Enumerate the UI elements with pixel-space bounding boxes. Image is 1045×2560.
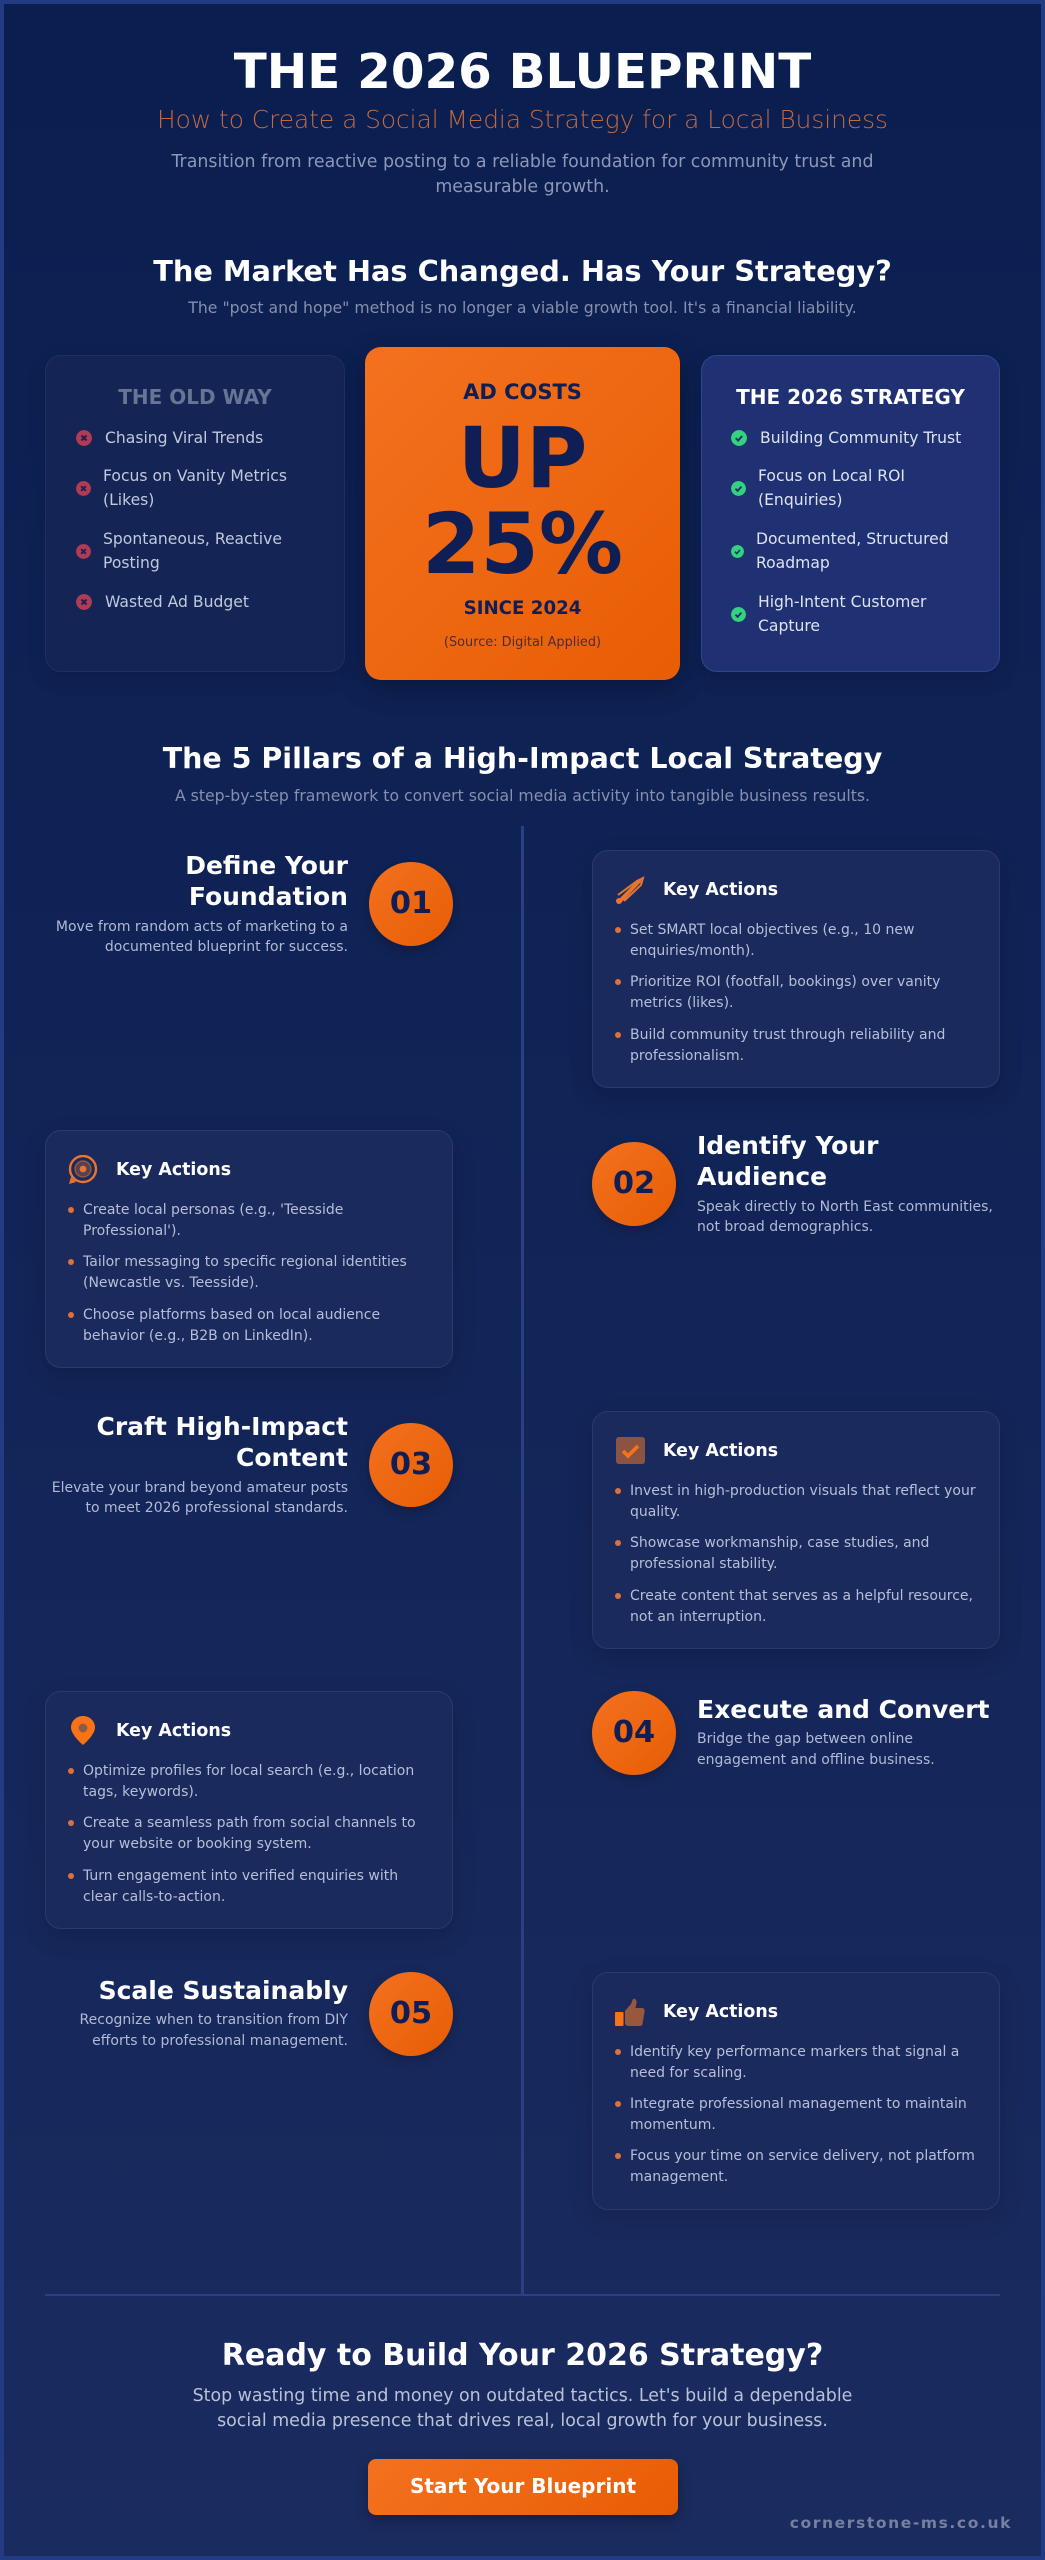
action list: Focus your time on service delivery, not platform bbox=[630, 2148, 975, 2164]
card heading: Key Actions bbox=[116, 1721, 231, 1741]
pillar 1 description bbox=[56, 918, 348, 955]
icon: target bubble bbox=[68, 1155, 98, 1184]
cta heading: Ready to Build Your 2026 Strategy? bbox=[222, 2338, 823, 2373]
pillar 1 description: Move from random acts of marketing to a bbox=[56, 918, 348, 934]
action list: Integrate professional management to maintain bbox=[630, 2096, 967, 2112]
big stat: 25% bbox=[422, 495, 623, 593]
action list: Choose platforms based on local audience bbox=[83, 1307, 380, 1323]
item text bbox=[756, 530, 949, 572]
item text: High-Intent Customer bbox=[758, 593, 926, 611]
pillar 5 number bbox=[369, 1972, 453, 2056]
pillar 5 key actions card bbox=[592, 1972, 1000, 2210]
pillar 1 title: Define Your bbox=[185, 851, 348, 880]
pillar 3 description bbox=[52, 1480, 348, 1516]
action list: need for scaling. bbox=[630, 2064, 747, 2080]
panel: the old way bbox=[45, 355, 345, 672]
action list bbox=[68, 1202, 407, 1344]
action list: Create local personas (e.g., 'Teesside bbox=[83, 1202, 343, 1218]
item text: Focus on Vanity Metrics bbox=[103, 467, 287, 485]
action list bbox=[615, 922, 945, 1064]
item text: (Enquiries) bbox=[758, 491, 842, 509]
action list: professionalism. bbox=[630, 1048, 744, 1064]
stat label: AD COSTS bbox=[463, 380, 582, 404]
pillar 4 title block bbox=[697, 1694, 1001, 1774]
website footer: cornerstone-ms.co.uk bbox=[790, 2514, 1012, 2532]
subheading: 5 pillars: A step-by-step framework to convert social media activity into tangible business results. bbox=[175, 786, 870, 805]
panel: ad costs stat bbox=[365, 347, 680, 680]
action list: Invest in high-production visuals that reflect your bbox=[630, 1483, 976, 1499]
icon: cross bbox=[76, 430, 92, 446]
pillar 2 number bbox=[592, 1142, 676, 1226]
strategy item 4 bbox=[731, 593, 926, 635]
action list: Create a seamless path from social channels to bbox=[83, 1815, 416, 1831]
old way item 2 bbox=[76, 467, 287, 509]
pillar 3 title block bbox=[52, 1412, 348, 1516]
pillar 1 description: documented blueprint for success. bbox=[105, 939, 348, 955]
action list: Turn engagement into verified enquiries with bbox=[83, 1868, 398, 1884]
source: (Source: Digital Applied) bbox=[444, 635, 601, 650]
icon: cross bbox=[76, 594, 92, 610]
pillar 5 description: Recognize when to transition from DIY bbox=[80, 2012, 348, 2028]
pillar 5 title: Scale Sustainably bbox=[99, 1976, 348, 2005]
action list: (Newcastle vs. Teesside). bbox=[83, 1275, 259, 1291]
pillar 4 number bbox=[592, 1691, 676, 1775]
pillar 1 title bbox=[185, 851, 348, 911]
action list: your website or booking system. bbox=[83, 1836, 312, 1852]
action list: not an interruption. bbox=[630, 1609, 766, 1625]
since label: SINCE 2024 bbox=[464, 598, 581, 619]
action list bbox=[615, 1483, 976, 1625]
action list: Optimize profiles for local search (e.g., location bbox=[83, 1763, 414, 1779]
subtitle: How to Create a Social Media Strategy for a Local Business bbox=[157, 105, 888, 134]
pillar 2 number: 02 bbox=[613, 1166, 655, 1201]
pillar 1 number bbox=[369, 862, 453, 946]
item text: (Likes) bbox=[103, 491, 154, 509]
icon: pen bbox=[616, 876, 644, 904]
icon: cross bbox=[76, 544, 91, 559]
card heading: Key Actions bbox=[116, 1160, 231, 1180]
pillar 2 description: Speak directly to North East communities, bbox=[697, 1198, 993, 1214]
item text: Wasted Ad Budget bbox=[105, 593, 249, 611]
heading: market changed: The Market Has Changed. Has Your Strategy? bbox=[153, 254, 892, 288]
intro text bbox=[171, 152, 874, 197]
pillar 3 description: to meet 2026 professional standards. bbox=[85, 1500, 348, 1516]
pillar 3 title: Craft High-Impact bbox=[96, 1412, 348, 1441]
cta text: social media presence that drives real, local growth for your business. bbox=[217, 2410, 828, 2430]
icon: check bbox=[731, 607, 746, 622]
item text: Building Community Trust bbox=[760, 429, 961, 447]
pillar 1 title: Foundation bbox=[189, 882, 348, 911]
pillar 5 title block bbox=[44, 1975, 348, 2055]
pillar 5 description bbox=[80, 2010, 348, 2051]
big stat: UP bbox=[458, 409, 587, 507]
card heading: Key Actions bbox=[663, 1441, 778, 1461]
pillar 3 title: Content bbox=[236, 1443, 348, 1472]
item text: Spontaneous, Reactive bbox=[103, 530, 282, 548]
item text: Roadmap bbox=[756, 554, 830, 572]
heading: 5 pillars: The 5 Pillars of a High-Impact Local Strategy bbox=[163, 742, 882, 775]
icon: check bbox=[731, 481, 746, 496]
big stat bbox=[422, 409, 623, 593]
action list: quality. bbox=[630, 1504, 680, 1520]
icon: check box bbox=[616, 1437, 645, 1464]
action list: Professional'). bbox=[83, 1223, 181, 1239]
strategy heading: THE 2026 STRATEGY bbox=[736, 385, 965, 409]
item text: Capture bbox=[758, 617, 820, 635]
action list: professional stability. bbox=[630, 1556, 777, 1572]
item text: Posting bbox=[103, 554, 160, 572]
pillar 2 title: Audience bbox=[697, 1162, 827, 1191]
old way item 1 bbox=[76, 429, 263, 447]
intro text: measurable growth. bbox=[435, 177, 610, 197]
old way heading: THE OLD WAY bbox=[118, 385, 272, 409]
pillar 4 description bbox=[697, 1729, 935, 1770]
action list: behavior (e.g., B2B on LinkedIn). bbox=[83, 1328, 313, 1344]
pillar 2 title: Identify Your bbox=[697, 1131, 878, 1160]
pillar 5 number: 05 bbox=[390, 1996, 432, 2031]
item text: Focus on Local ROI bbox=[758, 467, 905, 485]
card heading: Key Actions bbox=[663, 880, 778, 900]
subheading: market changed: The "post and hope" method is no longer a viable growth tool. It's a financial liability. bbox=[188, 298, 857, 317]
cta text: Stop wasting time and money on outdated tactics. Let's build a dependable bbox=[193, 2386, 852, 2406]
item text bbox=[103, 467, 287, 509]
pillar 4 key actions card bbox=[45, 1691, 453, 1929]
card heading: Key Actions bbox=[663, 2002, 778, 2022]
icon: check bbox=[731, 430, 747, 446]
icon: check bbox=[731, 545, 744, 558]
cta button bbox=[368, 2459, 678, 2515]
pillar 1 title block bbox=[56, 851, 348, 955]
pillar 3 title bbox=[96, 1412, 348, 1472]
pillar 2 key actions card bbox=[45, 1130, 453, 1368]
action list: Identify key performance markers that signal a bbox=[630, 2044, 959, 2060]
item text bbox=[758, 467, 905, 509]
action list: Set SMART local objectives (e.g., 10 new bbox=[630, 922, 914, 938]
pillar 4 description: engagement and offline business. bbox=[697, 1752, 935, 1768]
action list: management. bbox=[630, 2169, 728, 2185]
old way item 3 bbox=[76, 530, 282, 572]
pillar 3 description: Elevate your brand beyond amateur posts bbox=[52, 1480, 348, 1496]
title: THE 2026 BLUEPRINT bbox=[234, 44, 811, 100]
panel: the 2026 strategy bbox=[701, 355, 1000, 672]
icon: thumbs up bbox=[615, 1996, 645, 2026]
pillar 2 description bbox=[697, 1198, 993, 1235]
pillar 2 description: not broad demographics. bbox=[697, 1219, 873, 1235]
cta text bbox=[4, 2384, 1041, 2433]
action list bbox=[68, 1763, 416, 1905]
pillar 4 number: 04 bbox=[613, 1715, 655, 1750]
pillar 1 key actions card bbox=[592, 850, 1000, 1088]
action list: Prioritize ROI (footfall, bookings) over vanity bbox=[630, 974, 940, 990]
action list: Build community trust through reliability and bbox=[630, 1027, 945, 1043]
action list bbox=[630, 2042, 975, 2198]
cta button: Start Your Blueprint bbox=[410, 2474, 636, 2498]
pillar 3 number bbox=[369, 1423, 453, 1507]
pillar 5 description: efforts to professional management. bbox=[92, 2033, 348, 2049]
icon: cross bbox=[76, 481, 91, 496]
icon: location pin bbox=[71, 1716, 95, 1745]
strategy item 3 bbox=[731, 530, 949, 572]
item text: Chasing Viral Trends bbox=[105, 429, 263, 447]
pillar 1 number: 01 bbox=[390, 886, 432, 921]
pillar 4 title: Execute and Convert bbox=[697, 1695, 990, 1724]
strategy item 1 bbox=[731, 429, 961, 447]
pillar 3 number: 03 bbox=[390, 1447, 432, 1482]
action list: tags, keywords). bbox=[83, 1784, 198, 1800]
old way item 4 bbox=[76, 593, 249, 611]
action list: momentum. bbox=[630, 2117, 716, 2133]
action list: Showcase workmanship, case studies, and bbox=[630, 1535, 929, 1551]
action list: enquiries/month). bbox=[630, 943, 755, 959]
action list: Create content that serves as a helpful resource, bbox=[630, 1588, 973, 1604]
strategy item 2 bbox=[731, 467, 905, 509]
item text: Documented, Structured bbox=[756, 530, 949, 548]
item text bbox=[758, 593, 926, 635]
pillar 4 description: Bridge the gap between online bbox=[697, 1731, 913, 1747]
pillar 2 title block bbox=[697, 1131, 993, 1235]
action list: metrics (likes). bbox=[630, 995, 734, 1011]
pillar 3 key actions card bbox=[592, 1411, 1000, 1649]
pillar 2 title bbox=[697, 1131, 878, 1191]
action list: Tailor messaging to specific regional identities bbox=[83, 1254, 407, 1270]
action list: clear calls-to-action. bbox=[83, 1889, 225, 1905]
item text bbox=[103, 530, 282, 572]
intro text: Transition from reactive posting to a reliable foundation for community trust and bbox=[171, 152, 874, 172]
